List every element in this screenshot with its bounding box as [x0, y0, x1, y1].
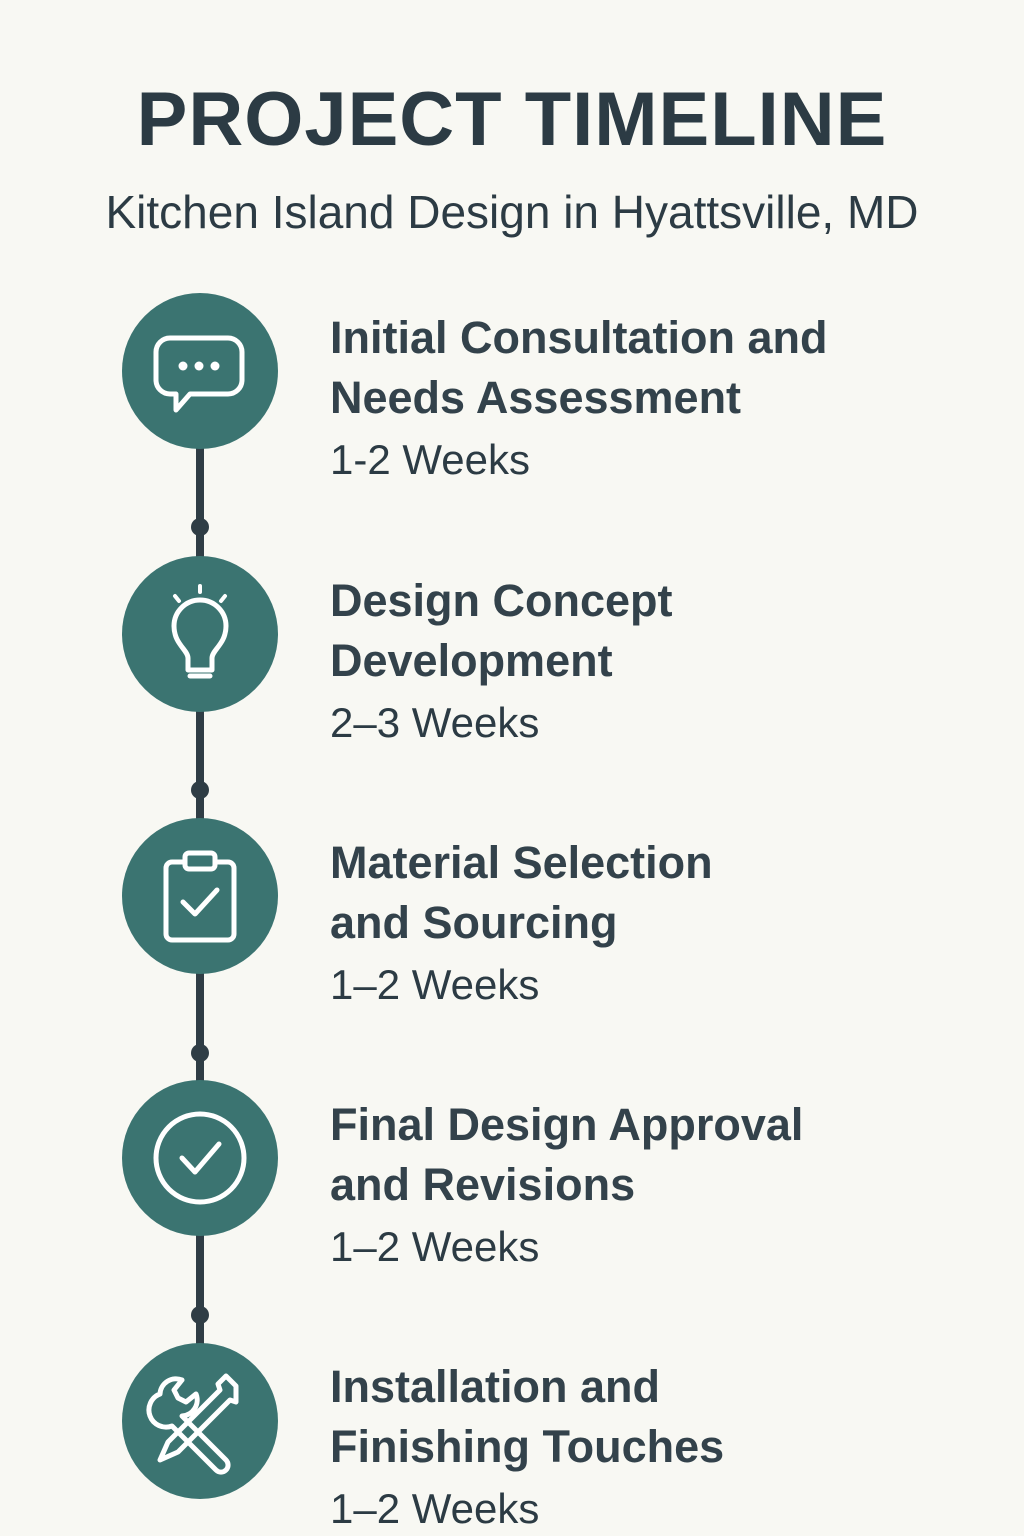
step 1: [330, 312, 827, 483]
step 5: 1–2 Weeks: [330, 1485, 539, 1532]
step 5: Finishing Touches: [330, 1421, 724, 1472]
step 3: 1–2 Weeks: [330, 961, 539, 1008]
step 2: [330, 575, 673, 746]
step 4: and Revisions: [330, 1159, 635, 1210]
step 2: Development: [330, 635, 613, 686]
step 4: Final Design Approval: [330, 1099, 803, 1150]
step 3: and Sourcing: [330, 897, 618, 948]
step 2: Design Concept: [330, 575, 673, 626]
icon: chat bubble: [122, 293, 278, 449]
step 1: 1-2 Weeks: [330, 436, 530, 483]
title: PROJECT TIMELINE: [137, 77, 887, 162]
step 1: Needs Assessment: [330, 372, 741, 423]
icon: clipboard: [122, 818, 278, 974]
icon: tools: [122, 1343, 278, 1499]
step 5: Installation and: [330, 1361, 660, 1412]
subtitle: Kitchen Island Design in Hyattsville, MD: [106, 186, 918, 238]
step 3: Material Selection: [330, 837, 713, 888]
icon: light bulb: [122, 556, 278, 712]
icon: check circle: [122, 1080, 278, 1236]
step 1: Initial Consultation and: [330, 312, 827, 363]
step 4: [330, 1099, 803, 1270]
step 4: 1–2 Weeks: [330, 1223, 539, 1270]
step 5: [330, 1361, 724, 1532]
step 2: 2–3 Weeks: [330, 699, 539, 746]
step 3: [330, 837, 713, 1008]
timeline line: [191, 371, 209, 1421]
